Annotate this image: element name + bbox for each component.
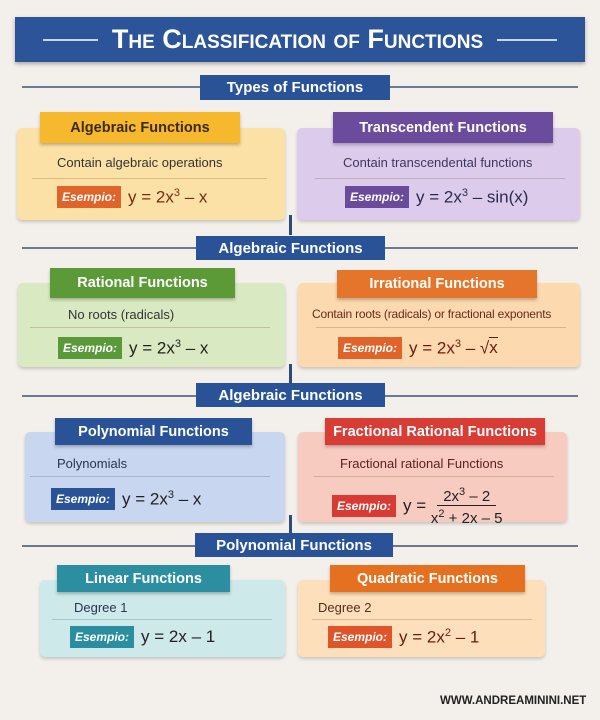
- panel: quadratic functions: y = 2x2 – 1: [399, 627, 479, 646]
- tab: algebraic: [40, 112, 240, 143]
- panel: fractional rational functions: Esempio:: [337, 498, 391, 512]
- tab: algebraic: Algebraic Functions: [70, 120, 210, 136]
- section: polynomial functions: Polynomial Functions: [216, 536, 372, 554]
- panel: rational functions: No roots (radicals): [68, 307, 174, 322]
- panel: algebraic functions: [17, 128, 285, 220]
- panel: fractional rational functions: y =: [403, 496, 426, 514]
- tab: quadratic: Quadratic Functions: [357, 570, 498, 586]
- section: algebraic functions: [196, 236, 385, 260]
- panel: polynomial functions: Esempio:: [56, 492, 110, 506]
- panel: linear functions: Esempio:: [75, 630, 129, 644]
- panel: polynomial functions: [25, 432, 285, 522]
- panel: rational functions: Esempio:: [63, 341, 117, 355]
- section: types of functions: Types of Functions: [227, 79, 363, 96]
- footer: WWW.ANDREAMININI.NET: [440, 695, 586, 707]
- section: algebraic functions: Algebraic Functions: [218, 240, 363, 256]
- tab: linear: Linear Functions: [85, 570, 202, 586]
- panel: irrational functions: [298, 283, 580, 367]
- panel: transcendent functions: Contain transcendental functions: [343, 155, 532, 170]
- panel: transcendent functions: [297, 128, 580, 220]
- title banner: The Classification of Functions: [112, 24, 483, 54]
- panel: transcendent functions: y = 2x3 – sin(x): [416, 187, 528, 206]
- tab: linear: [57, 565, 230, 592]
- tab: irrational: [337, 270, 537, 298]
- panel: irrational functions: Esempio:: [343, 341, 397, 355]
- panel: polynomial functions: Polynomials: [57, 456, 127, 471]
- tab: rational: [50, 268, 235, 298]
- tab: transcendent: [333, 112, 553, 143]
- tab: quadratic: [330, 565, 525, 592]
- title banner: [15, 17, 585, 62]
- panel: irrational functions: y = 2x3 – √x: [409, 338, 498, 357]
- panel: quadratic functions: [298, 580, 545, 657]
- panel: fractional rational functions: 2x3 – 2: [443, 486, 490, 505]
- panel: fractional rational functions: x2 + 2x – 5: [431, 508, 502, 527]
- panel: linear functions: Degree 1: [74, 600, 127, 615]
- panel: quadratic functions: Esempio:: [333, 630, 387, 644]
- panel: fractional rational functions: [298, 432, 567, 522]
- panel: quadratic functions: Degree 2: [318, 600, 371, 615]
- section: types of functions: [200, 75, 390, 100]
- arrow: [289, 364, 292, 384]
- panel: algebraic functions: y = 2x3 – x: [128, 187, 207, 206]
- arrow: [289, 215, 292, 235]
- tab: fractional rational: Fractional Rational Functions: [333, 424, 537, 440]
- panel: polynomial functions: y = 2x3 – x: [122, 489, 201, 508]
- tab: rational: Rational Functions: [77, 275, 208, 291]
- section: algebraic functions 2: Algebraic Functions: [218, 386, 363, 404]
- tab: transcendent: Transcendent Functions: [359, 120, 527, 136]
- panel: linear functions: [40, 580, 285, 657]
- panel: rational functions: y = 2x3 – x: [129, 338, 208, 357]
- panel: linear functions: y = 2x – 1: [141, 627, 215, 646]
- tab: fractional rational: [325, 418, 545, 445]
- section: algebraic functions 2: [196, 383, 385, 407]
- panel: transcendent functions: Esempio:: [350, 190, 404, 204]
- panel: algebraic functions: Contain algebraic operations: [57, 155, 222, 170]
- arrow: [289, 515, 292, 535]
- panel: rational functions: [18, 283, 285, 367]
- tab: polynomial: Polynomial Functions: [78, 424, 229, 440]
- panel: fractional rational functions: Fractional rational Functions: [340, 456, 503, 471]
- tab: irrational: Irrational Functions: [369, 276, 505, 292]
- panel: algebraic functions: Esempio:: [62, 190, 116, 204]
- tab: polynomial: [55, 418, 252, 445]
- section: polynomial functions: [195, 533, 393, 557]
- panel: irrational functions: Contain roots (radicals) or fractional exponents: [312, 307, 551, 321]
